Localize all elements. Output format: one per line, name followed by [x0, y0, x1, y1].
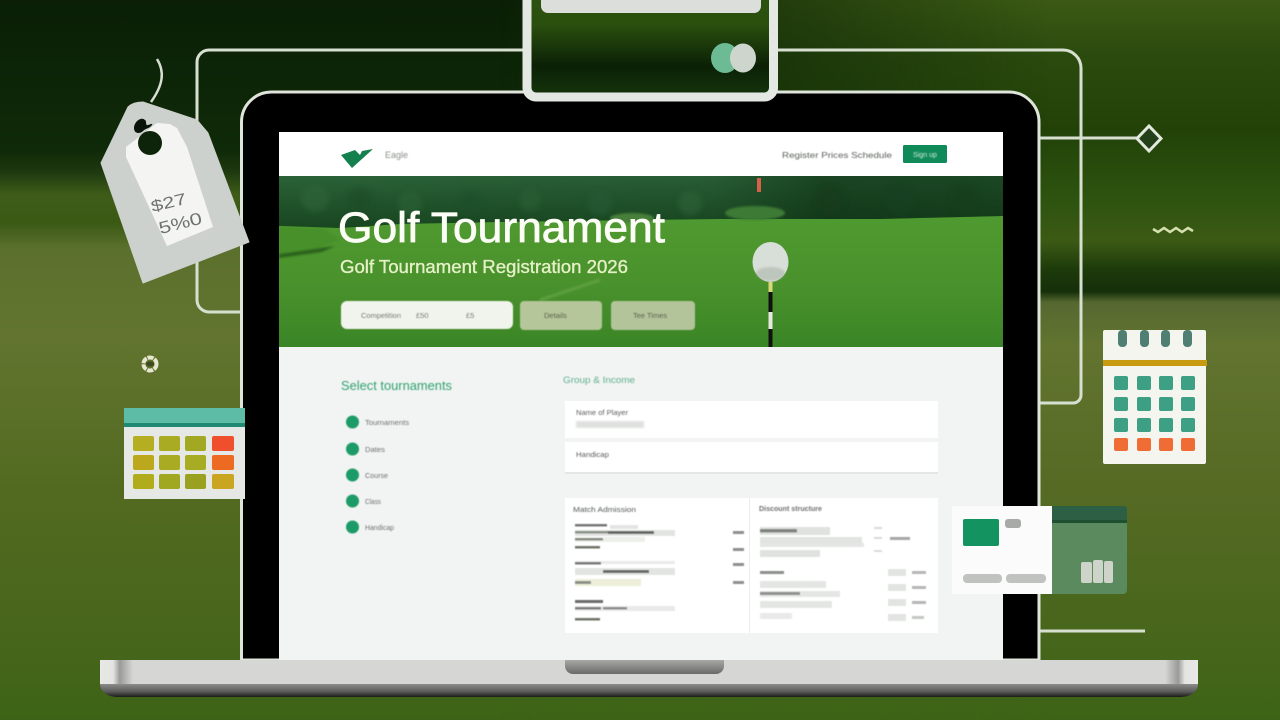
button: [520, 301, 602, 330]
brand name: Eagle: [385, 150, 408, 160]
connector lines: [197, 50, 1145, 631]
white card: [952, 506, 1052, 594]
calendar header: [124, 408, 245, 424]
hero banner: [279, 176, 1003, 347]
tag knot: [134, 119, 152, 133]
icon: calendar left: [124, 408, 245, 499]
tag price: $27: [149, 191, 188, 216]
card logo: [963, 519, 999, 546]
primary search pill: [341, 301, 513, 329]
section heading: Select tournaments: [341, 379, 452, 393]
green card: [1040, 506, 1127, 594]
list item: [346, 416, 409, 428]
base lower edge: [100, 684, 1198, 697]
right results table: Discount structure: [759, 506, 822, 513]
price tag: 5%0: [157, 209, 204, 238]
nav button: [903, 145, 947, 163]
list item: Class: [365, 497, 381, 506]
left results table: [573, 505, 744, 620]
list item: [346, 520, 394, 534]
hero title: Golf Tournament: [338, 204, 665, 252]
form field: [565, 442, 938, 472]
hero subtitle: Golf Tournament Registration 2026: [340, 257, 628, 277]
left results table: Match Admission: [573, 505, 636, 514]
list item: [346, 442, 385, 456]
laptop: [100, 92, 1198, 697]
base deck: [100, 660, 1198, 684]
binding rings: [1118, 330, 1192, 347]
right column: form: [563, 375, 938, 633]
icon: diamond connector: [1137, 126, 1161, 151]
form field: Handicap: [576, 450, 609, 459]
flag: [757, 178, 761, 192]
icon: small gear: [144, 358, 156, 370]
form field: Name of Player: [576, 408, 629, 417]
screen background: [279, 132, 1003, 660]
button: Tee Times: [633, 311, 667, 320]
nav links: Register Prices Schedule: [782, 151, 893, 160]
calendar cells: [1114, 376, 1195, 451]
laptop bezel: [242, 92, 1039, 660]
list item: [346, 468, 388, 482]
calendar cells: [133, 436, 234, 489]
tree line: [279, 176, 1003, 228]
right results table: [759, 506, 926, 621]
top card bar: [541, 0, 761, 13]
logo: [341, 149, 373, 168]
icon: calendar right: [1103, 330, 1207, 464]
icon: squiggle: [1153, 228, 1193, 232]
left column: tournament list: [341, 379, 452, 534]
primary search pill: £50: [416, 311, 429, 320]
primary search pill: Competition: [361, 311, 401, 320]
tag body: [101, 102, 249, 283]
top floating card: [527, 0, 774, 97]
list item: Tournaments: [365, 418, 409, 427]
trackpad notch: [565, 660, 724, 674]
list item: [346, 494, 381, 508]
form heading: Group & Income: [563, 375, 635, 386]
screen page: [279, 132, 1003, 660]
nav button: Sign up: [913, 152, 937, 159]
laptop base: [100, 660, 1198, 697]
panel divider: [749, 498, 750, 633]
payment cards: [952, 506, 1127, 594]
tag string: [151, 59, 162, 102]
button: Details: [544, 311, 567, 320]
price tag: [101, 59, 249, 283]
list item: Course: [365, 471, 388, 480]
list item: Handicap: [365, 523, 394, 532]
list item: Dates: [365, 445, 385, 454]
calendar band: [1103, 360, 1207, 366]
toggle circles: [711, 43, 756, 73]
card chip: [1081, 560, 1113, 583]
results panel: [565, 498, 938, 633]
golf ball on tee: [752, 242, 788, 347]
tag inner label: [126, 123, 213, 246]
button: [611, 301, 695, 330]
background bushes: [279, 206, 785, 300]
primary search pill: £5: [466, 311, 474, 320]
form field: [565, 401, 938, 438]
tag hole: [138, 131, 162, 155]
nav bar: [279, 132, 1003, 176]
